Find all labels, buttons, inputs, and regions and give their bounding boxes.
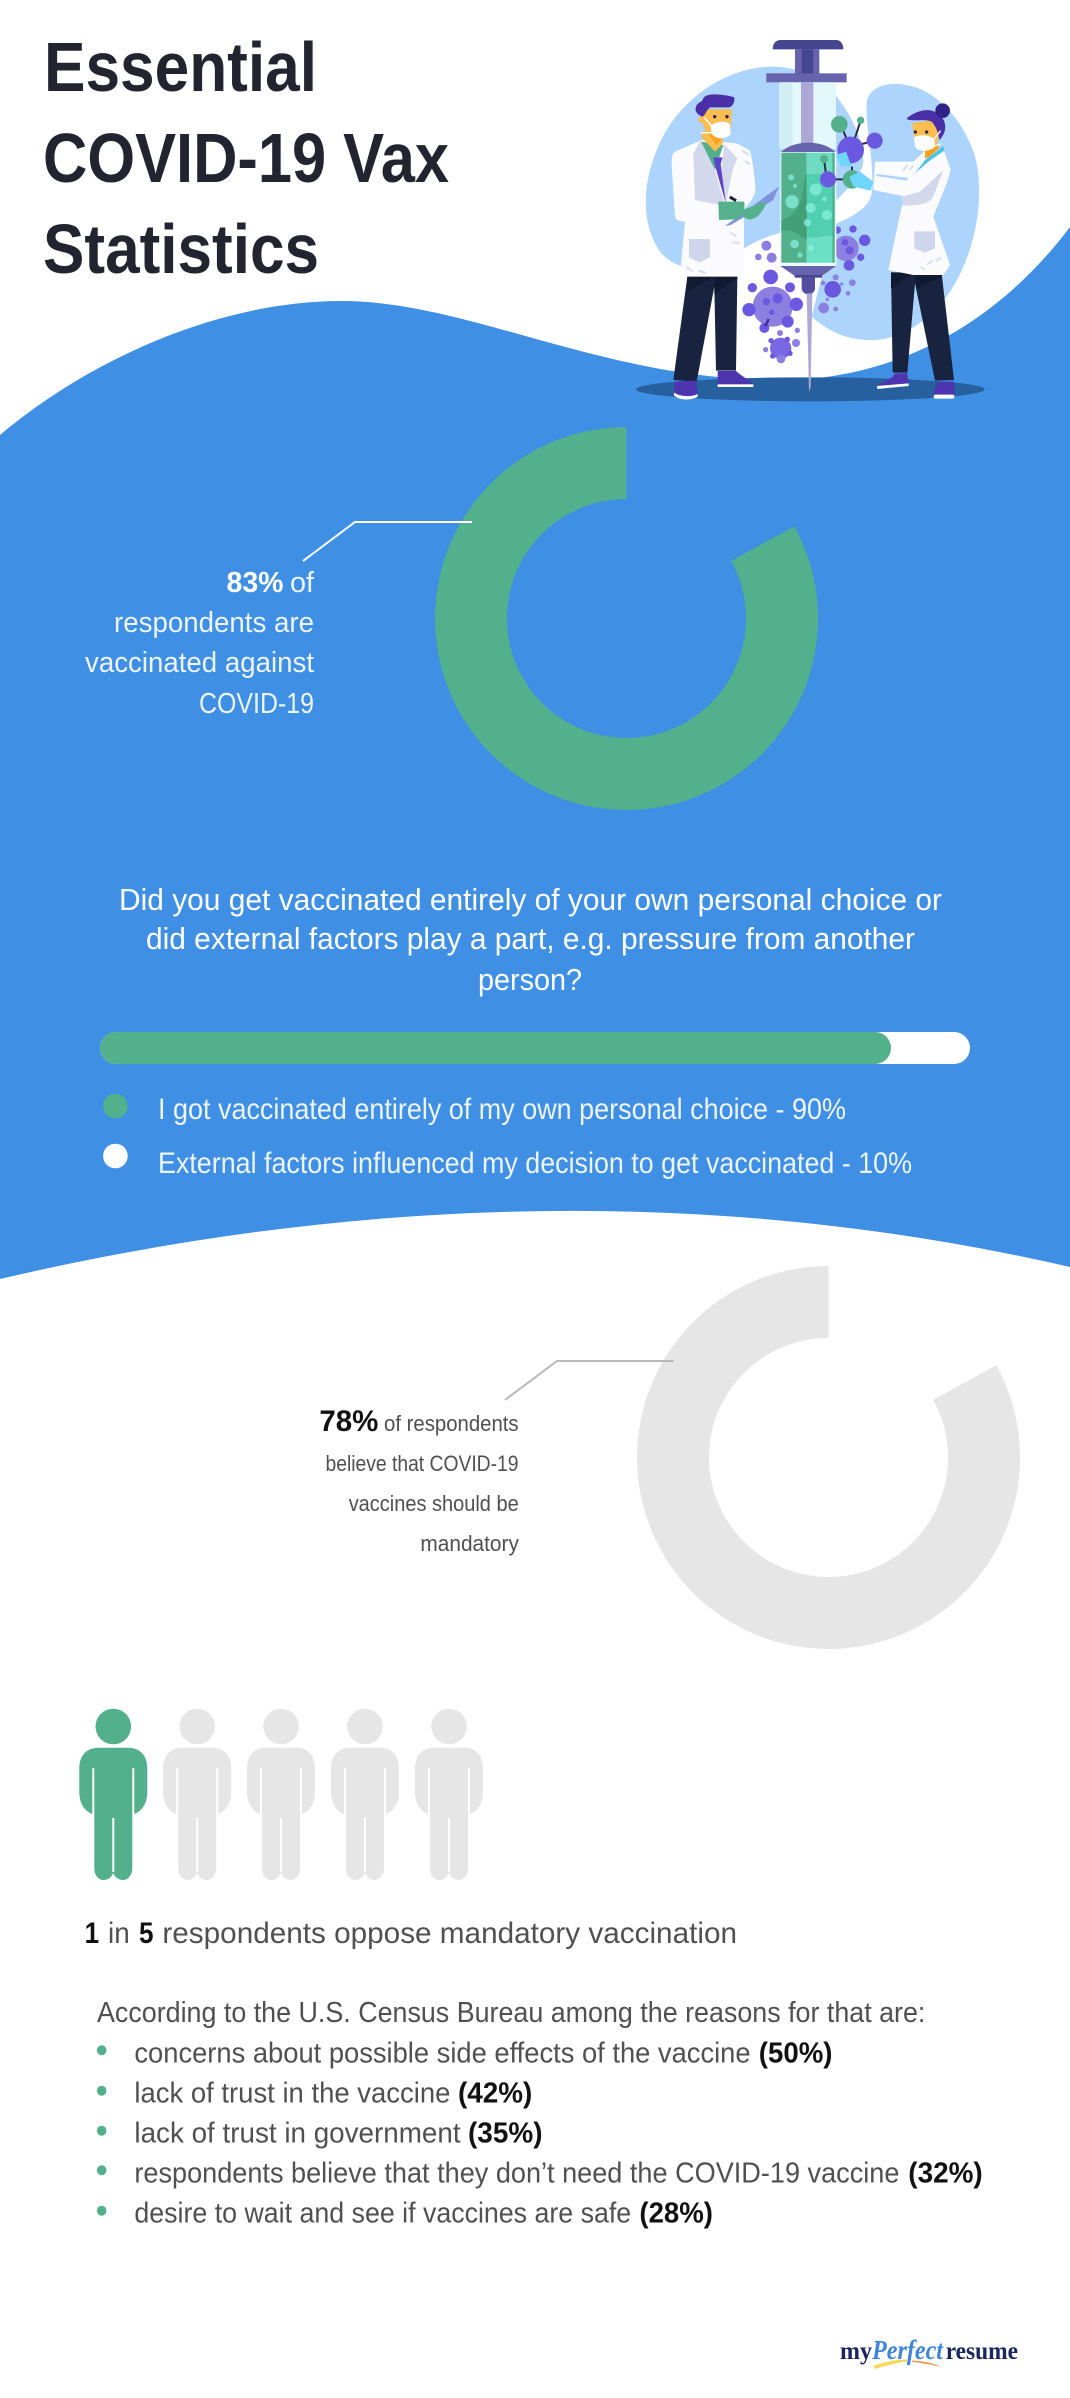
person 5 [415, 1709, 483, 1880]
syringe [766, 40, 847, 392]
text: 78% believe vaccines should be mandatory: vaccines should be [349, 1491, 519, 1516]
text: 78% believe vaccines should be mandatory: 78% [319, 1405, 378, 1438]
bullet list of reasons [97, 2037, 983, 2229]
reason 4: respondents believe that they don’t need the COVID-19 vaccine [134, 2157, 899, 2189]
virus: large [742, 270, 803, 333]
reason 2: (42%) [458, 2077, 532, 2109]
scientist: man [672, 94, 779, 400]
logo: myPerfectResume: my [840, 2338, 872, 2365]
donut chart: 78% mandatory [637, 1266, 1020, 1649]
text: 83% of respondents are vaccinated [85, 567, 315, 720]
text: 1 in 5 oppose mandatory vaccination: 1 [85, 1917, 99, 1950]
reason 5: desire to wait and see if vaccines are safe [134, 2197, 631, 2229]
virus dots upper [755, 241, 856, 313]
text: 78% believe vaccines should be mandatory [319, 1405, 519, 1556]
text: 78% believe vaccines should be mandatory: of respondents [384, 1411, 519, 1436]
progress bar: 90% vs 10% [100, 1032, 970, 1064]
reason 3: (35%) [468, 2117, 542, 2149]
title: Statistics [43, 210, 319, 288]
scientist: woman [873, 103, 955, 399]
logo: myPerfectResume: resume [946, 2338, 1018, 2365]
title [43, 28, 449, 288]
callout line: 78% [505, 1361, 674, 1400]
survey question: person? [478, 962, 582, 997]
pictogram: 1 in 5 people [79, 1709, 483, 1880]
survey question [119, 882, 942, 997]
reason 4: (32%) [908, 2157, 983, 2189]
person 4 [331, 1709, 399, 1880]
text: 78% believe vaccines should be mandatory: mandatory [420, 1531, 519, 1556]
virus: right [833, 225, 870, 271]
legend: external factors: External factors influenced my decision to get vaccinated - 10% [158, 1147, 912, 1180]
text: 1 in 5 oppose mandatory vaccination: respondents oppose mandatory vaccination [162, 1917, 737, 1950]
title: COVID-19 Vax [43, 119, 449, 197]
text: 83% of respondents are vaccinated: of [290, 567, 315, 599]
logo: myPerfectResume [840, 2335, 1018, 2369]
reason 1: concerns about possible side effects of the vaccine [134, 2037, 751, 2069]
text: 83% of respondents are vaccinated: vaccinated against [85, 647, 314, 679]
text: 83% of respondents are vaccinated: COVID-19 [199, 688, 314, 720]
text: 83% of respondents are vaccinated: 83% [226, 567, 284, 599]
donut chart: 83% vaccinated [435, 427, 818, 810]
text: 78% believe vaccines should be mandatory: believe that COVID-19 [326, 1451, 518, 1476]
reason 1: (50%) [759, 2037, 832, 2069]
virus: tiny right [821, 274, 843, 301]
legend: own personal choice: I got vaccinated entirely of my own personal choice - 90% [158, 1093, 846, 1126]
person 1 highlighted [79, 1709, 147, 1880]
survey question: Did you get vaccinated entirely of your own personal choice or [119, 882, 942, 917]
virus: small lower [763, 328, 800, 363]
reason 5: (28%) [639, 2197, 713, 2229]
reason 2: lack of trust in the vaccine [134, 2077, 450, 2109]
callout line: 83% [303, 522, 472, 561]
blue wave background panel [0, 227, 1070, 1279]
survey question: did external factors play a part, e.g. pressure from another [146, 921, 915, 956]
text: 83% of respondents are vaccinated: respondents are [114, 607, 314, 639]
light blue blobs [646, 67, 979, 340]
molecule with gloves [820, 116, 883, 191]
ground shadow [636, 377, 985, 401]
person 2 [163, 1709, 231, 1880]
logo: myPerfectResume: Perfect [871, 2335, 944, 2365]
text: 1 in 5 oppose mandatory vaccination: in [108, 1917, 130, 1950]
intro text: census bureau reasons: According to the U.S. Census Bureau among the reasons for that are: [97, 1997, 925, 2029]
illustration: scientists with syringe [636, 40, 985, 401]
text: 1 in 5 oppose mandatory vaccination: 5 [139, 1917, 154, 1950]
title: Essential [44, 28, 317, 106]
reason 3: lack of trust in government [134, 2117, 461, 2149]
person 3 [247, 1709, 315, 1880]
